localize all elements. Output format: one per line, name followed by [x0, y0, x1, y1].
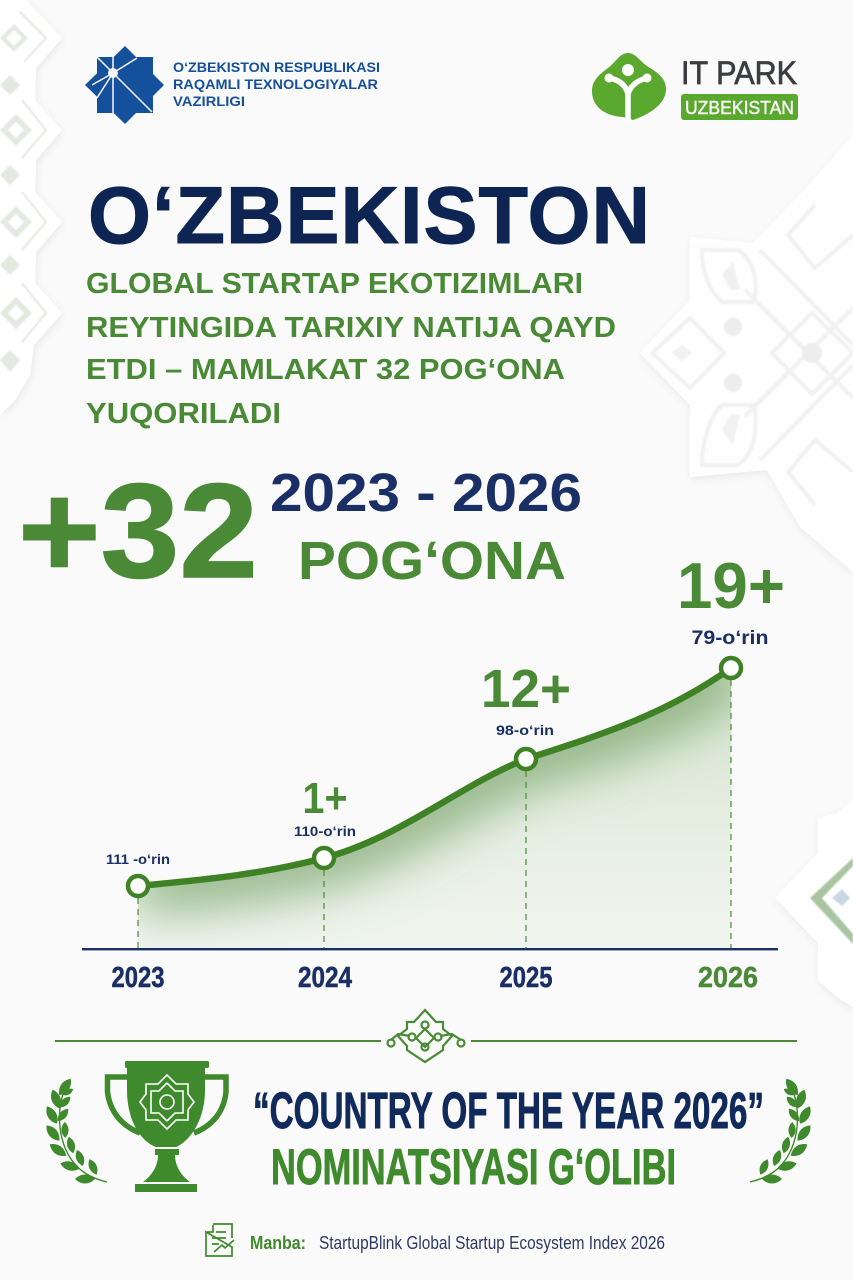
laurel left [43, 1076, 107, 1184]
award subtitle: NOMINATSIYASI G‘OLIBI [271, 1139, 676, 1195]
decorative ornament: right star [640, 135, 853, 572]
ministry name [173, 60, 380, 109]
gain labels [302, 549, 785, 823]
subtitle: YUQORILADI [86, 398, 281, 430]
year labels: 2024 [298, 962, 352, 994]
value labels: 98-o‘rin [496, 722, 554, 738]
value labels: 110-o‘rin [294, 823, 356, 839]
ministry name: O‘ZBEKISTON RESPUBLIKASI [173, 60, 380, 75]
IT Park wordmark: IT PARK [681, 55, 797, 91]
icon: document [206, 1224, 234, 1256]
pog'ona label: POG‘ONA [298, 531, 566, 591]
subtitle: GLOBAL STARTAP EKOTIZIMLARI [86, 268, 583, 300]
year labels: 2023 [112, 962, 164, 994]
year labels: 2025 [500, 962, 552, 994]
decorative ornament: right lower [775, 800, 853, 1007]
ministry name: VAZIRLIGI [173, 94, 245, 109]
ministry name: RAQAMLI TEXNOLOGIYALAR [173, 77, 378, 92]
subtitle: REYTINGIDA TARIXIY NATIJA QAYD [86, 312, 616, 344]
line chart [82, 549, 785, 994]
value labels: 79-o‘rin [692, 628, 768, 649]
year labels [112, 962, 758, 994]
subtitle [86, 268, 616, 430]
gain labels: 1+ [302, 774, 348, 823]
source [206, 1224, 665, 1256]
decorative ornament: left top [0, 0, 62, 415]
subtitle: ETDI – MAMLAKAT 32 POG‘ONA [86, 354, 565, 386]
gain labels: 19+ [677, 549, 785, 622]
trophy handles [108, 1077, 226, 1133]
year labels: 2026 [698, 962, 758, 994]
IT Park logo [592, 53, 798, 120]
ministry logo [85, 46, 380, 124]
data markers [128, 658, 741, 896]
gain labels: 12+ [481, 659, 571, 719]
trophy stem and base [135, 1149, 197, 1192]
chart area [138, 677, 731, 948]
source label: Manba: [250, 1233, 306, 1253]
big stat: +32: +32 [18, 457, 258, 606]
period: 2023 - 2026 [270, 463, 582, 523]
icon: ministry star [85, 46, 164, 124]
value labels [106, 628, 768, 867]
trophy emblem [140, 1075, 194, 1129]
axis [82, 948, 778, 950]
source text: StartupBlink Global Startup Ecosystem Index 2026 [319, 1233, 665, 1253]
chart line [138, 668, 731, 886]
title: O‘ZBEKISTON [88, 171, 650, 261]
icon: IT Park leaf [592, 53, 666, 120]
Uzbekistan badge: UZBEKISTAN [685, 98, 794, 118]
value labels: 111 -o‘rin [106, 851, 170, 867]
trophy [108, 1061, 226, 1192]
laurel right [750, 1076, 814, 1184]
divider with ornament [55, 1010, 797, 1062]
trophy cup [127, 1068, 205, 1147]
